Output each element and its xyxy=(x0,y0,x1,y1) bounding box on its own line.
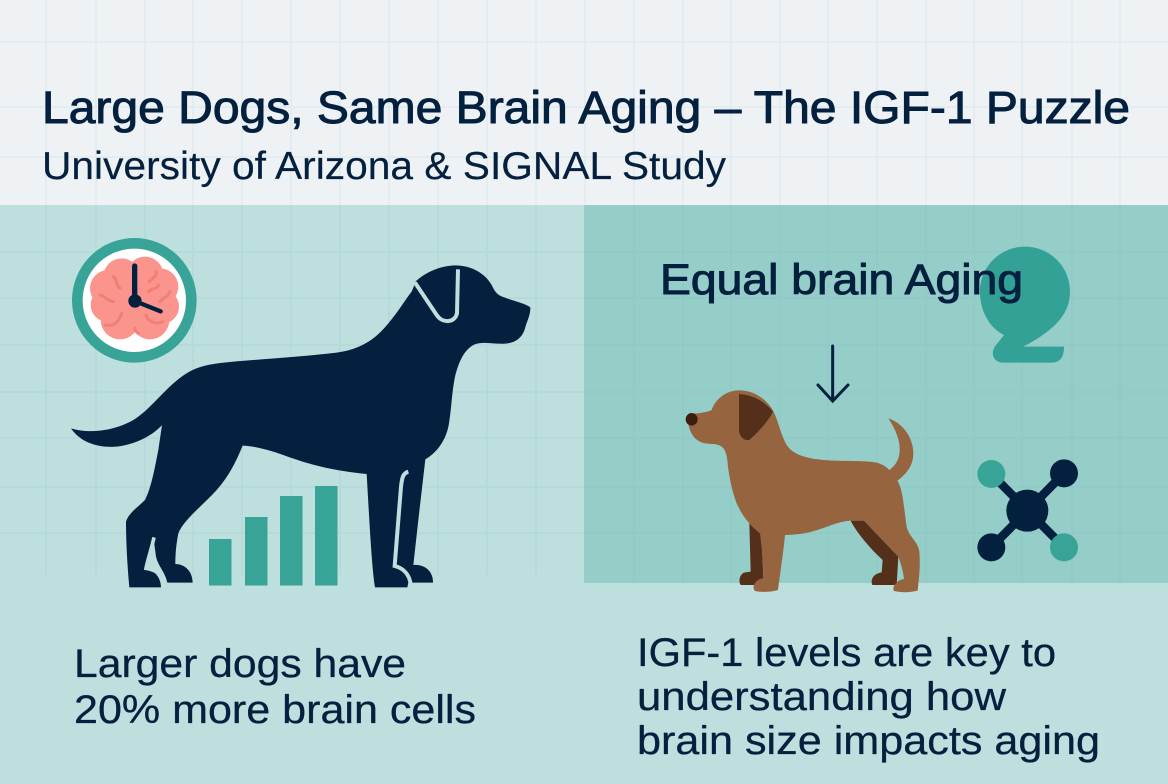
caption: larger dogs xyxy=(74,642,476,732)
icon: brain clock xyxy=(77,243,191,357)
icon: molecule network xyxy=(977,459,1078,561)
subtitle: University of Arizona & SIGNAL Study xyxy=(42,145,727,188)
caption: IGF-1 levels xyxy=(637,631,1100,763)
caption: IGF-1 levels: IGF-1 levels are key to xyxy=(637,631,1056,675)
arrow: down xyxy=(818,346,848,401)
header panel xyxy=(0,0,1168,205)
icon: teal speech shape xyxy=(980,247,1070,363)
heading: equal brain aging: Equal brain Aging xyxy=(660,256,1023,304)
caption: IGF-1 levels: understanding how xyxy=(637,675,1006,719)
caption: larger dogs: 20% more brain cells xyxy=(74,688,476,732)
bar chart xyxy=(209,486,338,586)
large dog silhouette xyxy=(71,265,530,587)
caption: larger dogs: Larger dogs have xyxy=(74,642,406,686)
panel: left large dog background xyxy=(0,205,1168,784)
title: Large Dogs, Same Brain Aging – The IGF-1 Puzzle xyxy=(42,82,1130,133)
caption: IGF-1 levels: brain size impacts aging xyxy=(637,719,1100,763)
small brown dog xyxy=(686,390,920,592)
panel: right small dog background xyxy=(584,205,1168,583)
